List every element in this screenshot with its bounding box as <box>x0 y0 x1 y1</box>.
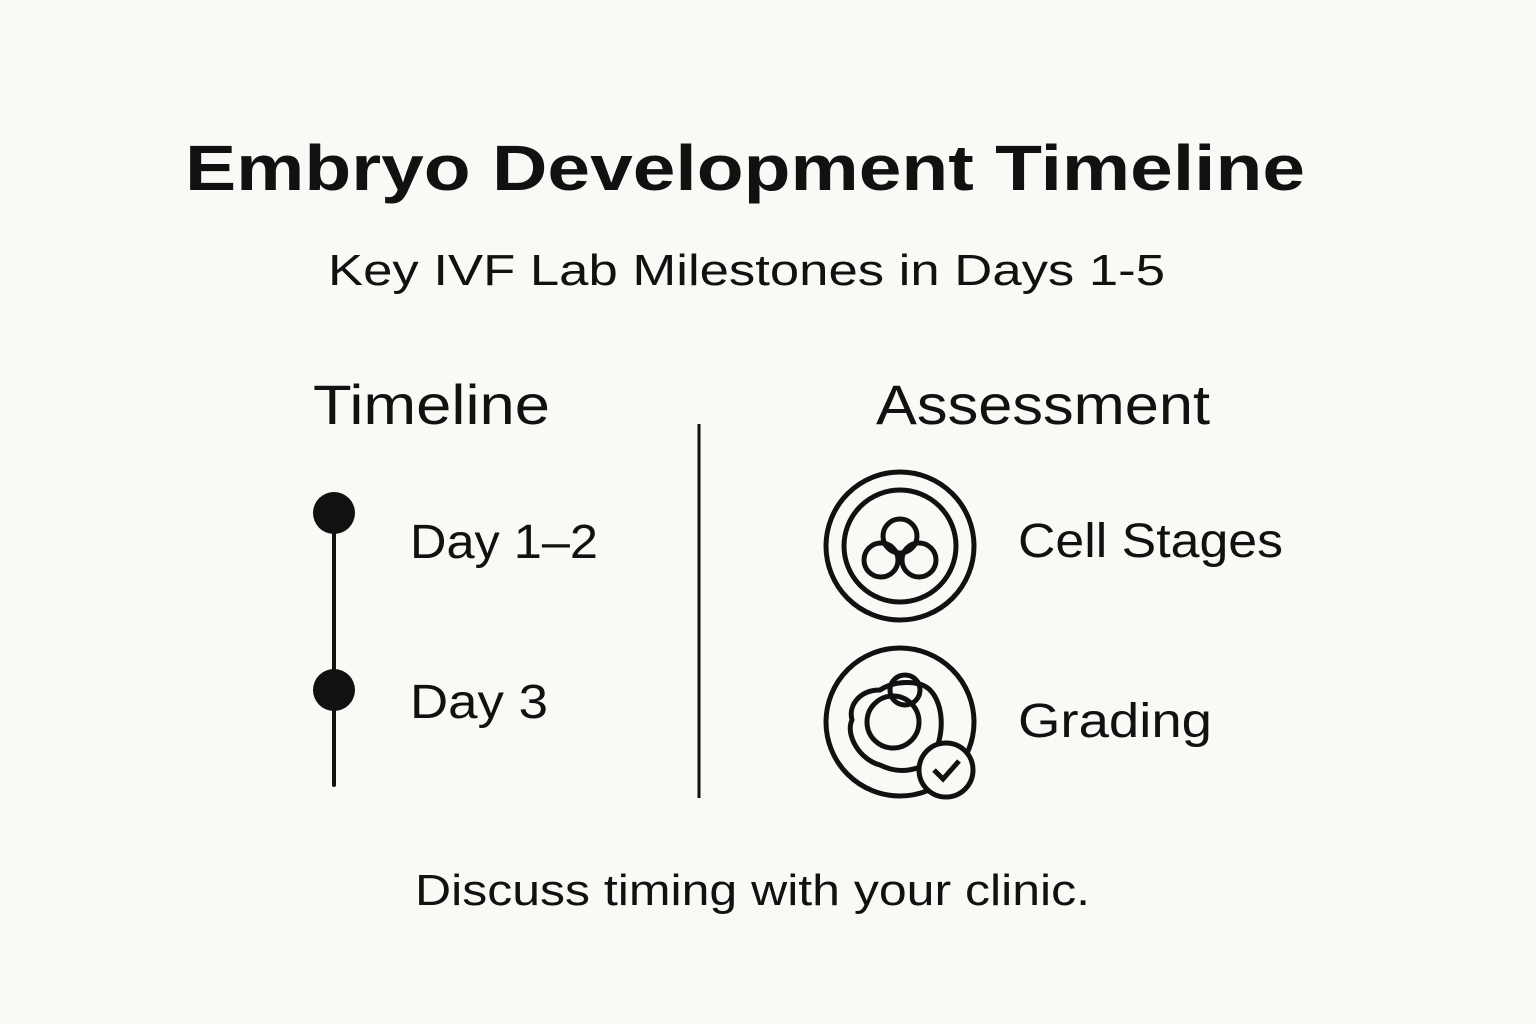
timeline line <box>332 515 336 785</box>
dot: day 3 <box>313 669 355 711</box>
label: Cell Stages: Cell Stages <box>1018 515 1283 568</box>
dot: day 1-2 <box>313 492 355 534</box>
panel: timeline <box>313 373 598 785</box>
icon: grading <box>826 648 974 797</box>
label: Day 1-2: Day 1–2 <box>410 516 598 569</box>
heading: Assessment: Assessment <box>876 373 1210 436</box>
divider <box>698 424 700 798</box>
panel: assessment <box>826 373 1283 797</box>
label: Grading: Grading <box>1018 695 1212 748</box>
footer note: Discuss timing with your clinic. <box>415 866 1090 915</box>
heading: Timeline: Timeline <box>313 373 550 436</box>
icon: cell stages <box>826 472 974 620</box>
title: Embryo Development Timeline <box>185 132 1305 204</box>
label: Day 3: Day 3 <box>410 676 548 729</box>
subtitle: Key IVF Lab Milestones in Days 1-5 <box>328 246 1165 295</box>
